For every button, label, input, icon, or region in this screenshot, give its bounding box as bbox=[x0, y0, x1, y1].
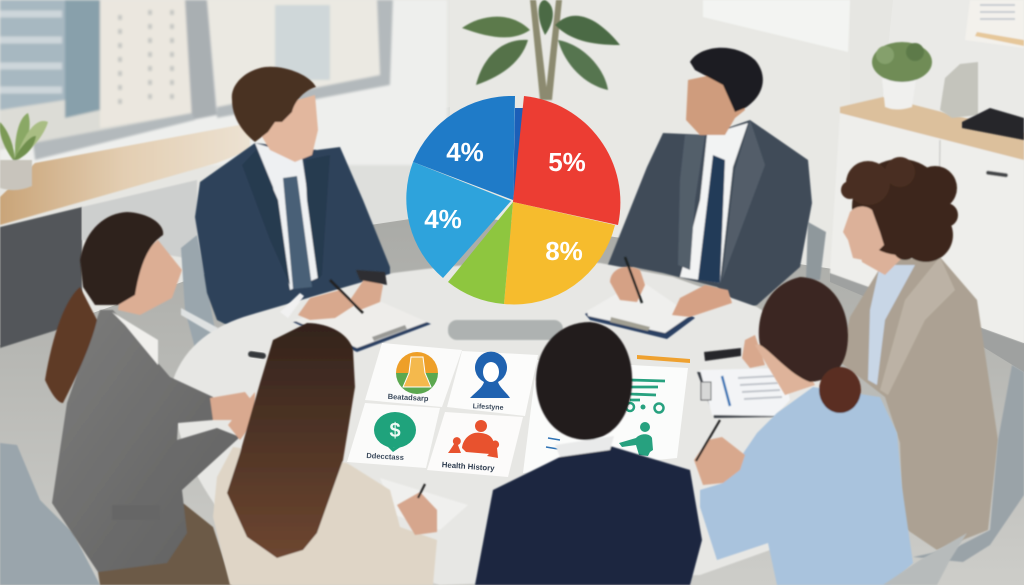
pie slice: green bbox=[448, 202, 513, 304]
chair behind man in grey suit bbox=[806, 222, 826, 280]
orange bar bbox=[637, 355, 690, 363]
lower wall panel bbox=[0, 207, 82, 348]
woman in light blue shirt bbox=[694, 277, 913, 585]
chair right bbox=[913, 365, 1024, 562]
potted plant on ledge bbox=[0, 113, 48, 190]
man with curly hair bbox=[840, 157, 998, 550]
card: health history: Health History bbox=[441, 460, 496, 473]
card: demographics bbox=[365, 343, 462, 407]
chair left bbox=[0, 443, 100, 585]
card: finances bbox=[347, 403, 440, 468]
woman in cream jacket bbox=[213, 323, 437, 585]
chair behind man in navy suit bbox=[181, 235, 215, 348]
card: finances: $ bbox=[389, 420, 401, 442]
pie label 4 percent left: 4% bbox=[424, 204, 462, 234]
card: demographics: Beatadsarp bbox=[387, 392, 429, 403]
clipboard left bbox=[293, 300, 431, 352]
cabinet bbox=[830, 97, 1024, 343]
man in navy suit bbox=[195, 67, 390, 328]
pen on table bbox=[248, 351, 266, 359]
hands over clipboard left bbox=[280, 270, 387, 320]
wall corner bbox=[883, 0, 1024, 133]
clipboard right bbox=[585, 280, 695, 339]
potted plant on cabinet bbox=[872, 42, 932, 110]
poster on wall bbox=[965, 0, 1024, 48]
pie label 8 percent: 8% bbox=[545, 236, 583, 266]
table device bbox=[448, 320, 563, 340]
hands over clipboard right bbox=[610, 257, 732, 317]
whiteboard on wall bbox=[703, 0, 850, 52]
chair arm bbox=[181, 308, 218, 335]
paper under bottom left woman's hand bbox=[380, 478, 468, 530]
pie slice: light blue bbox=[406, 162, 511, 278]
pie label 5 percent: 5% bbox=[548, 147, 586, 177]
pie slice: dark blue sliver bbox=[513, 108, 526, 202]
card: lifestyle: Lifestyne bbox=[473, 403, 504, 412]
man in grey suit bbox=[607, 48, 812, 310]
wooden window ledge bbox=[0, 123, 250, 225]
pie label 4 percent top: 4% bbox=[446, 137, 484, 167]
radiator bbox=[82, 180, 197, 260]
pie slice: red bbox=[513, 96, 620, 225]
front chair right bbox=[883, 533, 967, 585]
pie chart bbox=[406, 96, 620, 304]
file holder bbox=[940, 62, 978, 118]
man in navy blazer seen from behind bbox=[475, 322, 702, 585]
card: finances: Ddecctass bbox=[366, 451, 404, 462]
card: lifestyle bbox=[447, 351, 538, 416]
woman in grey blazer bbox=[45, 212, 255, 585]
conference table bbox=[173, 262, 860, 585]
card: health history bbox=[427, 412, 523, 477]
back plant bbox=[462, 0, 620, 100]
clipboard front right bbox=[697, 368, 790, 418]
pie slice: blue bbox=[413, 96, 515, 200]
desk tray bbox=[962, 108, 1024, 140]
pie slice: yellow bbox=[504, 202, 615, 304]
window with city view bbox=[0, 0, 447, 165]
dark marker bbox=[704, 348, 741, 361]
card: chart and person bbox=[523, 360, 688, 473]
